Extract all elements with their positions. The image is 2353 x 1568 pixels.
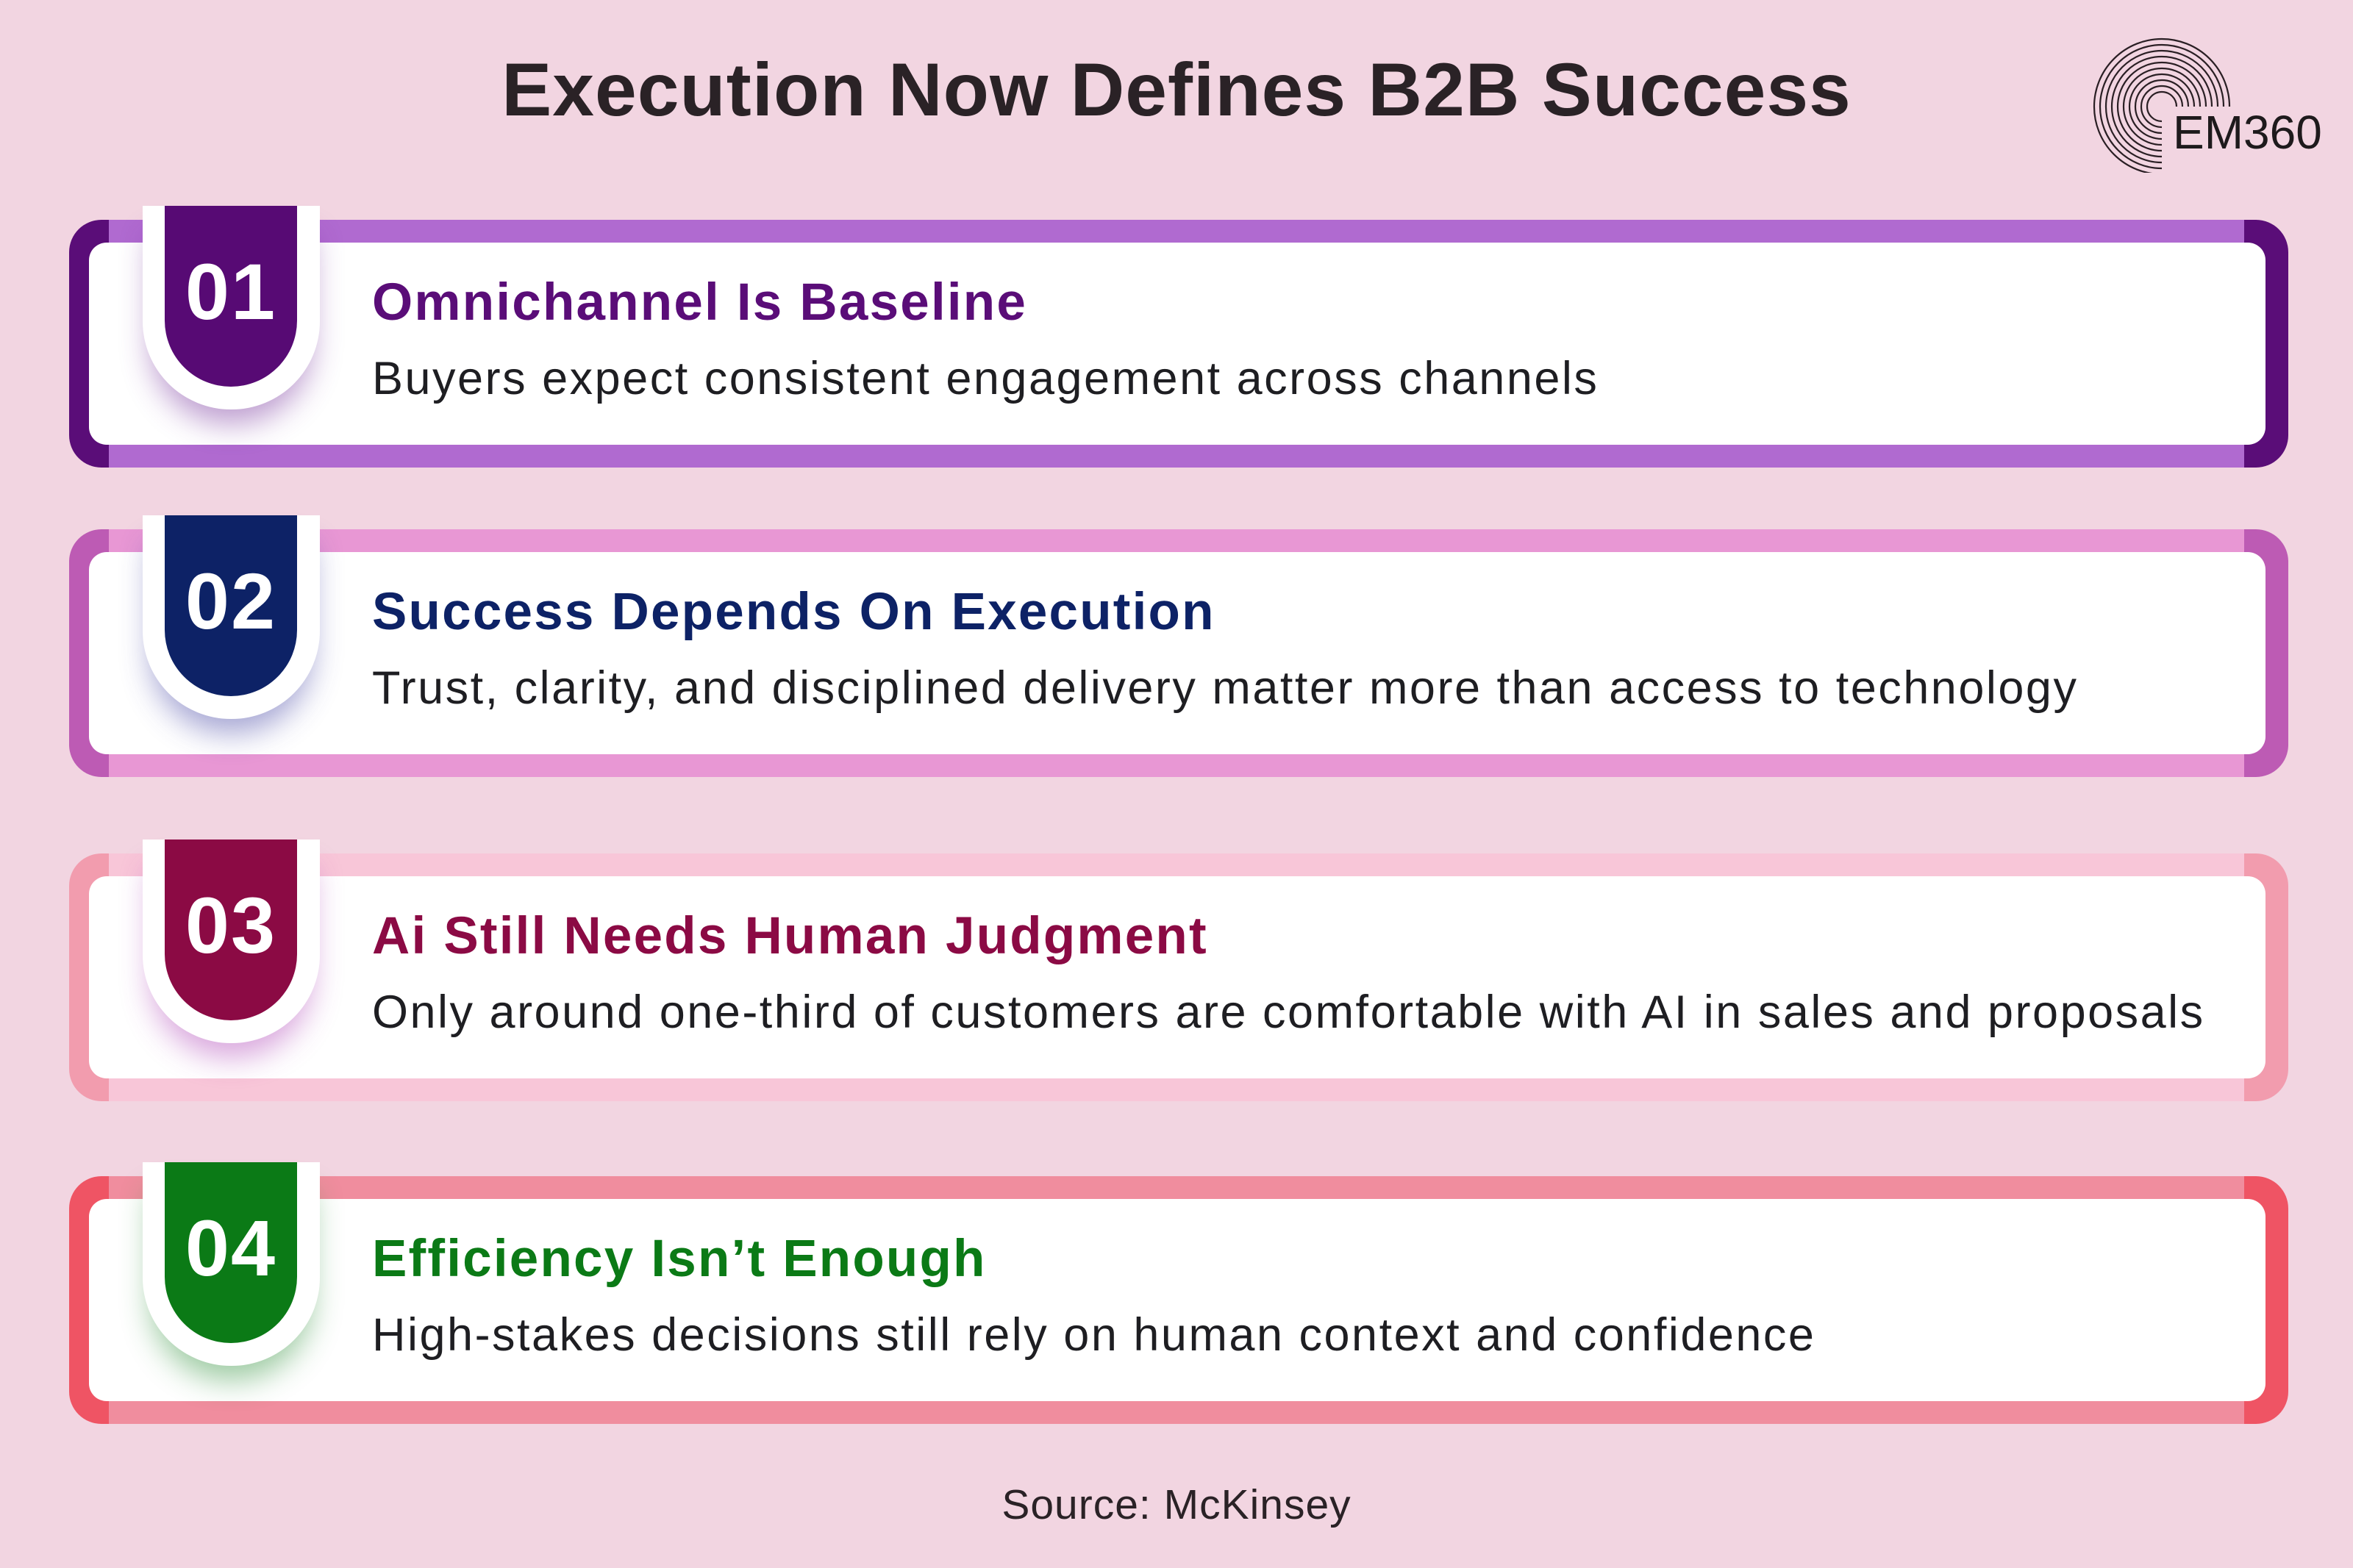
panel: 04 (69, 1176, 2288, 1424)
panel: 02 (69, 529, 2288, 777)
badge 02: 02 (185, 556, 276, 645)
badge 04 (143, 1162, 320, 1366)
heading 01: Omnichannel Is Baseline (372, 273, 1027, 332)
heading 03: Ai Still Needs Human Judgment (372, 907, 1208, 965)
text 01: Buyers expect consistent engagement across channels (372, 353, 1599, 404)
source: Source: McKinsey (1001, 1481, 1352, 1528)
badge 03: 03 (185, 881, 276, 970)
badge 02 (143, 515, 320, 719)
panel: 01 (69, 220, 2288, 468)
badge 03 (143, 840, 320, 1043)
text 03: Only around one-third of customers are comfortable with AI in sales and proposals (372, 987, 2205, 1038)
logo: EM360: EM360 (2173, 106, 2322, 159)
text 04: High-stakes decisions still rely on human context and confidence (372, 1309, 1815, 1361)
logo: EM360 (2093, 38, 2322, 173)
heading 02: Success Depends On Execution (372, 583, 1215, 641)
badge 04: 04 (185, 1203, 276, 1292)
badge 01 (143, 206, 320, 409)
text 02: Trust, clarity, and disciplined delivery matter more than access to technology (372, 662, 2078, 714)
heading 04: Efficiency Isn’t Enough (372, 1230, 987, 1288)
panel: 03 (69, 853, 2288, 1101)
title: Execution Now Defines B2B Success (501, 48, 1852, 132)
badge 01: 01 (185, 247, 276, 336)
